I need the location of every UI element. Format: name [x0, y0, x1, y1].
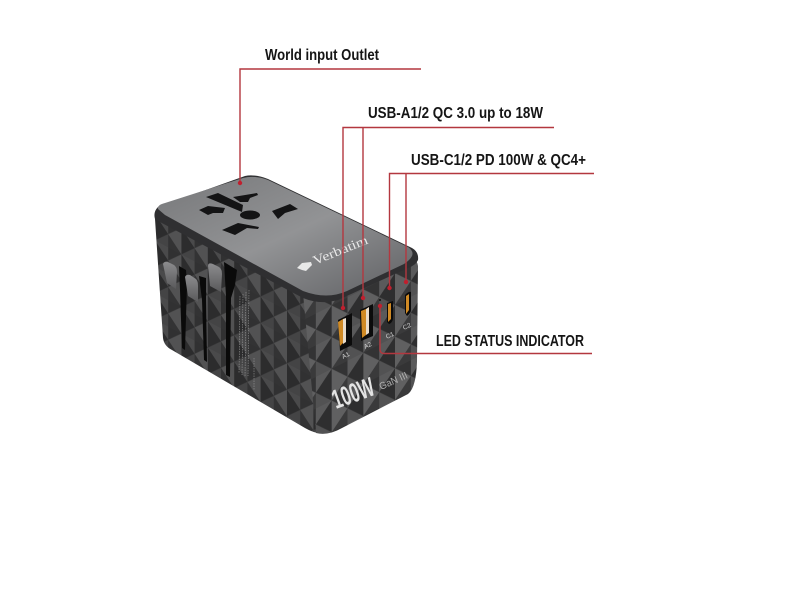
left face with faceted texture — [155, 214, 318, 433]
callout: USB-C ports: USB-C1/2 PD 100W & QC4+ — [411, 152, 586, 169]
callout: world input outlet: World input Outlet — [265, 47, 380, 64]
callout: USB-A ports — [341, 105, 554, 310]
USB-A2 port: A2 — [363, 341, 373, 351]
plug slider switches — [163, 262, 237, 377]
callout: world input outlet — [238, 47, 421, 185]
top outlet plate — [158, 177, 412, 296]
USB-A1 port — [338, 313, 352, 361]
LED indicator — [379, 299, 381, 301]
100W GaN badge: GaN III — [378, 370, 410, 393]
callout: USB-C ports — [387, 152, 594, 290]
callout: LED status indicator: LED STATUS INDICATOR — [436, 333, 584, 350]
Verbatim logo: Verbatim — [311, 232, 370, 268]
USB-C1 port: C1 — [385, 331, 396, 341]
USB-A2 port — [360, 304, 373, 351]
100W GaN badge: 100W — [328, 372, 379, 415]
safety certification small print — [239, 290, 254, 390]
top band rim — [154, 175, 418, 302]
universal outlet socket holes — [199, 193, 298, 235]
Verbatim logo — [297, 232, 370, 271]
USB-C2 port — [402, 292, 413, 332]
right face with faceted texture — [303, 261, 418, 434]
adapter device — [154, 175, 418, 434]
USB-C1 port — [385, 301, 396, 341]
USB-C2 port: C2 — [402, 322, 413, 332]
callout: LED status indicator — [378, 304, 592, 354]
callout: USB-A ports: USB-A1/2 QC 3.0 up to 18W — [368, 105, 544, 122]
USB-A1 port: A1 — [341, 351, 351, 361]
